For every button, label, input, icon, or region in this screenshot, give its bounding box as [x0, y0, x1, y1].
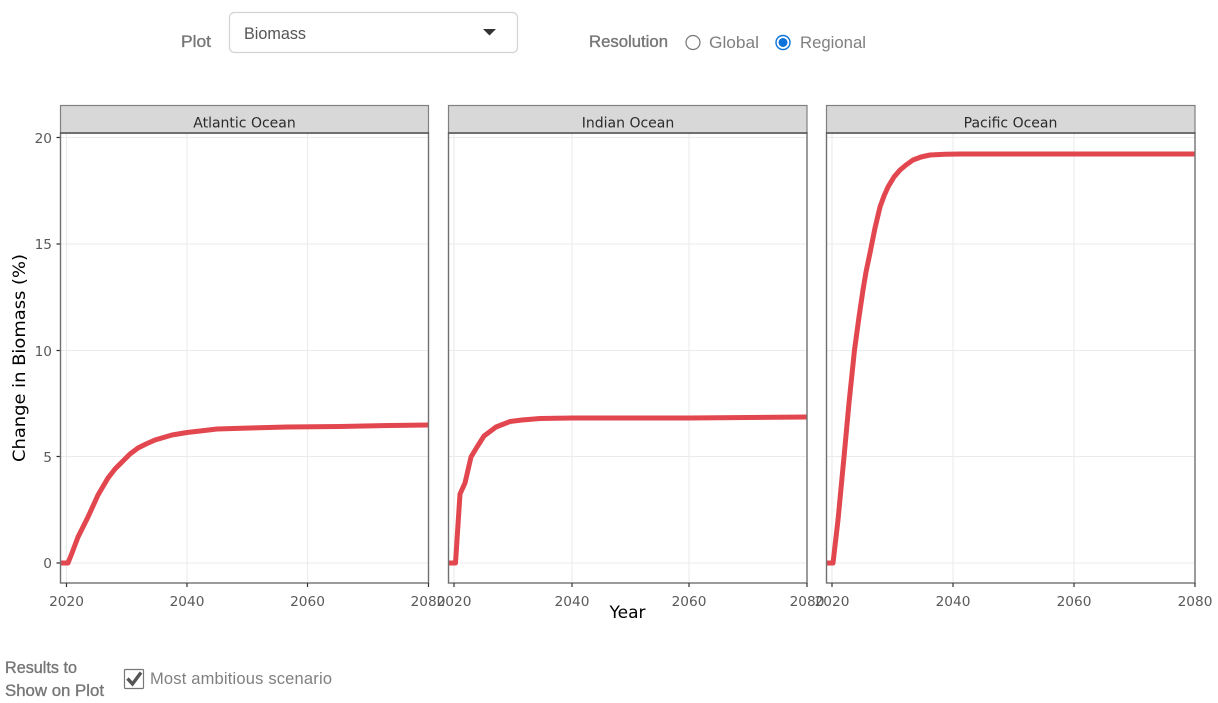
- pacific strip title: Pacific Ocean: [964, 116, 1057, 132]
- radio: regional: Regional: [800, 34, 866, 52]
- indian strip title: Indian Ocean: [582, 116, 674, 132]
- panel: Pacific Ocean: [815, 106, 1212, 610]
- radio: global: [686, 34, 759, 52]
- y axis tick labels: [35, 131, 60, 572]
- checkbox: most ambitious scenario: Most ambitious scenario: [150, 670, 332, 688]
- atlantic strip: [60, 106, 429, 133]
- resolution label: Resolution: [589, 33, 668, 51]
- indian frame: [448, 133, 807, 583]
- atlantic x ticks: 2060: [290, 594, 325, 610]
- y axis tick labels: 15: [35, 237, 52, 253]
- atlantic x ticks: 2020: [49, 594, 84, 610]
- y axis tick labels: 5: [43, 450, 52, 466]
- indian x ticks: 2080: [790, 594, 824, 610]
- pacific grid lines: [826, 133, 1195, 583]
- atlantic x ticks: 2040: [170, 594, 204, 610]
- plot dropdown: [230, 12, 518, 52]
- atlantic x ticks: 2080: [411, 594, 445, 610]
- panel: Indian Ocean: [437, 106, 824, 610]
- atlantic biomass curve: [60, 425, 428, 563]
- results label: [5, 659, 104, 700]
- pacific x ticks: [815, 583, 1212, 610]
- y axis tick labels: 10: [35, 344, 52, 360]
- indian strip: [448, 106, 808, 133]
- results label: Results to: [5, 659, 77, 677]
- results label: Show on Plot: [5, 682, 104, 700]
- indian biomass curve: [448, 417, 807, 563]
- atlantic frame: [60, 133, 428, 583]
- pacific frame: [826, 133, 1195, 583]
- atlantic strip title: Atlantic Ocean: [193, 116, 296, 132]
- pacific biomass curve: [826, 154, 1195, 563]
- indian x ticks: 2020: [437, 594, 471, 610]
- pacific x ticks: 2020: [815, 594, 849, 610]
- atlantic grid lines: [60, 133, 428, 583]
- pacific x ticks: 2060: [1057, 594, 1091, 610]
- indian x ticks: 2040: [555, 594, 589, 610]
- radio: global: Global: [709, 34, 759, 52]
- x axis title: Year: [608, 603, 646, 623]
- pacific x ticks: 2040: [936, 594, 970, 610]
- y axis tick labels: 0: [43, 556, 52, 572]
- pacific strip: [826, 106, 1196, 133]
- atlantic x ticks: [49, 583, 445, 610]
- plot selector label: Plot: [181, 33, 211, 51]
- pacific x ticks: 2080: [1178, 594, 1212, 610]
- y axis title: Change in Biomass (%): [10, 254, 30, 462]
- indian grid lines: [448, 133, 807, 583]
- indian x ticks: [437, 583, 824, 610]
- indian x ticks: 2060: [672, 594, 706, 610]
- panel: Atlantic Ocean: [49, 106, 445, 610]
- plot dropdown: Biomass: [244, 25, 306, 43]
- y axis tick labels: 20: [35, 131, 52, 147]
